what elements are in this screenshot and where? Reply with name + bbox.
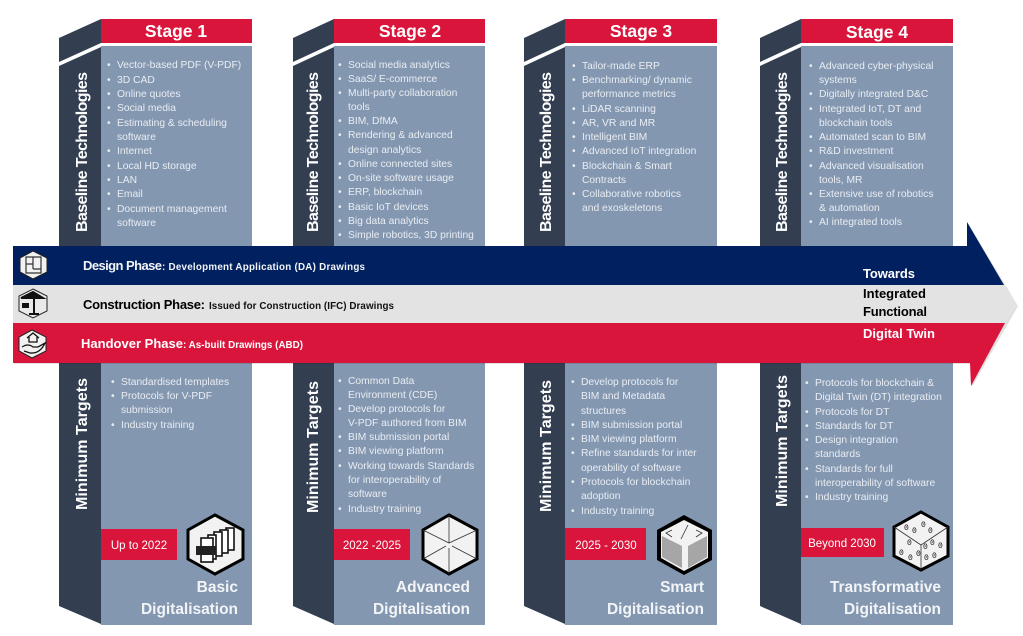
stage 4 baseline technologies list: systems xyxy=(819,75,857,86)
text: construction phase detail: Issued for Construction (IFC) Drawings xyxy=(209,301,395,312)
label: minimum targets: Minimum Targets xyxy=(538,380,555,512)
stage 2 minimum targets list: V-PDF authored from BIM xyxy=(348,418,466,429)
stage 1 baseline technologies list: Document management xyxy=(117,204,227,215)
stage 4 baseline technologies list: Extensive use of robotics xyxy=(819,189,933,200)
stage 1 minimum targets list: Standardised templates xyxy=(121,377,229,388)
stage 4 minimum targets list: Protocols for DT xyxy=(815,407,890,418)
stage 2 baseline technologies list: • xyxy=(338,173,342,184)
stage 3 baseline technologies list: Intelligent BIM xyxy=(582,132,647,143)
stage 2 minimum targets list: • xyxy=(338,446,342,457)
stage 4 baseline technologies list: • xyxy=(809,61,813,72)
stage 1 baseline technologies list: • xyxy=(107,89,111,100)
stage 1 baseline technologies list: Email xyxy=(117,189,143,200)
stage 3 title: Smart xyxy=(660,579,704,596)
icon: binary cube hexagon: 0 xyxy=(928,527,933,536)
stage 2 baseline technologies list: Basic IoT devices xyxy=(348,202,429,213)
label: baseline technologies: Baseline Technologies xyxy=(74,72,91,232)
stage 2 baseline technologies list: Simple robotics, 3D printing xyxy=(348,230,474,241)
stage 3 minimum targets list: • xyxy=(571,377,575,388)
text: towards integrated functional digital twin: Digital Twin xyxy=(863,326,935,341)
stage 1 baseline technologies list: software xyxy=(117,218,156,229)
date badge: 2025-2030 xyxy=(565,528,646,560)
stage 2 baseline technologies list: On-site software usage xyxy=(348,173,454,184)
icon: binary cube hexagon: 0 xyxy=(930,539,935,548)
arrow band: design phase xyxy=(13,222,1004,285)
icon: binary cube hexagon: 0 xyxy=(923,543,928,552)
stage 4 baseline technologies list: • xyxy=(809,217,813,228)
stage 2 baseline technologies list: • xyxy=(338,216,342,227)
arrow: three-phase timeline xyxy=(13,222,1018,387)
icon: house in hand xyxy=(19,330,46,358)
stage 4 baseline technologies list: • xyxy=(809,89,813,100)
panel: stage 2 column xyxy=(293,19,485,625)
stage 4 minimum targets list: interoperability of software xyxy=(815,478,935,489)
stage 3 minimum targets list: • xyxy=(571,434,575,445)
text: towards integrated functional digital twin xyxy=(863,266,935,341)
stage 2 baseline technologies list: • xyxy=(338,202,342,213)
stage 3 minimum targets list: operability of software xyxy=(581,463,681,474)
stage 4 header xyxy=(801,19,953,43)
stage 1 minimum targets list xyxy=(111,377,229,431)
icon: empty cube hexagon xyxy=(423,515,477,574)
stage 1 minimum targets list: • xyxy=(111,377,115,388)
icon: binary cube hexagon: 0 xyxy=(907,539,912,548)
stage 4 baseline technologies list: Advanced visualisation xyxy=(819,161,924,172)
stage 2 baseline technologies list: SaaS/ E-commerce xyxy=(348,74,438,85)
stage 4 minimum targets list: standards xyxy=(815,449,860,460)
stage 3 baseline technologies list: • xyxy=(572,75,576,86)
stage 2 minimum targets list: • xyxy=(338,404,342,415)
stage 2 baseline technologies list: Rendering & advanced xyxy=(348,130,453,141)
stage 3 baseline technologies list: LiDAR scanning xyxy=(582,104,656,115)
stage 3 minimum targets list: BIM viewing platform xyxy=(581,434,677,445)
stage 3 minimum targets list: • xyxy=(571,420,575,431)
date badge: beyond 2030 xyxy=(801,528,884,557)
stage 2 baseline technologies list: • xyxy=(338,230,342,241)
stage 4 baseline technologies list: Automated scan to BIM xyxy=(819,132,926,143)
stage 2 baseline technologies list: BIM, DfMA xyxy=(348,116,398,127)
stage 2 baseline technologies list: • xyxy=(338,116,342,127)
stage 4 title: Transformative xyxy=(830,579,941,596)
stage 3 title: Digitalisation xyxy=(607,601,704,618)
stage 3 baseline technologies list: Tailor-made ERP xyxy=(582,61,660,72)
text: towards integrated functional digital twin: Functional xyxy=(863,304,927,319)
stage 3 baseline technologies list xyxy=(572,61,697,214)
stage 3 minimum targets list: Industry training xyxy=(581,506,655,517)
stage 2 title: Digitalisation xyxy=(373,601,470,618)
stage 4 header: Stage 4 xyxy=(846,22,908,42)
stage 1 baseline technologies list: • xyxy=(107,60,111,71)
stage 4 baseline technologies list: AI integrated tools xyxy=(819,217,902,228)
stage 4 baseline technologies list: • xyxy=(809,132,813,143)
date badge: 2022-2025: 2022 -2025 xyxy=(343,540,401,552)
stage 2 baseline technologies list: • xyxy=(338,74,342,85)
stage 2 baseline technologies list: design analytics xyxy=(348,145,421,156)
stage 2 baseline technologies list: • xyxy=(338,187,342,198)
stage 3 baseline technologies list: • xyxy=(572,61,576,72)
stage 3 baseline technologies list: AR, VR and MR xyxy=(582,118,655,129)
icon: binary cube hexagon: 0 xyxy=(908,554,913,563)
text: handover phase detail: : As-built Drawings (ABD) xyxy=(183,340,303,351)
arrow band: handover phase xyxy=(13,323,1005,386)
stage 1 baseline technologies list: • xyxy=(107,103,111,114)
stage 4 baseline technologies list: & automation xyxy=(819,203,880,214)
panel: stage 3 column xyxy=(524,19,717,625)
stage 3 minimum targets list: Develop protocols for xyxy=(581,377,679,388)
stage 4 baseline technologies list: • xyxy=(809,146,813,157)
stage 3 baseline technologies list: • xyxy=(572,189,576,200)
stage 3 minimum targets list: • xyxy=(571,506,575,517)
icon: binary cube hexagon: 0 xyxy=(904,524,909,533)
stage 4 baseline technologies list: • xyxy=(809,104,813,115)
stage 3 baseline technologies list: and exoskeletons xyxy=(582,203,662,214)
stage 4 minimum targets list: • xyxy=(805,492,809,503)
icon: binary cube hexagon: 0 xyxy=(912,527,917,536)
stage 2 minimum targets list: BIM viewing platform xyxy=(348,446,444,457)
stage 2 baseline technologies list: • xyxy=(338,60,342,71)
label: baseline technologies: Baseline Technologies xyxy=(538,72,555,232)
text: design phase: Design Phase xyxy=(83,258,162,273)
text: handover phase: Handover Phase xyxy=(81,336,183,351)
stage 3 baseline technologies list: Advanced IoT integration xyxy=(582,146,697,157)
stage 1 baseline technologies list: Internet xyxy=(117,146,152,157)
stage 1 minimum targets list: submission xyxy=(121,405,173,416)
stage 2 minimum targets list: Develop protocols for xyxy=(348,404,446,415)
stage 2 minimum targets list: • xyxy=(338,376,342,387)
icon: binary cube hexagon xyxy=(894,512,948,570)
stage 2 minimum targets list: Industry training xyxy=(348,504,422,515)
stage 1 baseline technologies list: • xyxy=(107,189,111,200)
text: design phase detail: : Development Application (DA) Drawings xyxy=(162,262,366,273)
date badge: 2022-2025 xyxy=(334,529,410,560)
stage 1 title: Digitalisation xyxy=(141,601,238,618)
stage 1 baseline technologies list: • xyxy=(107,161,111,172)
icon: pdf documents hexagon xyxy=(188,515,243,574)
stage 3 minimum targets list: structures xyxy=(581,406,626,417)
stage 2 baseline technologies list: • xyxy=(338,130,342,141)
stage 3 baseline technologies list: performance metrics xyxy=(582,89,676,100)
stage 3 minimum targets list: BIM and Metadata xyxy=(581,391,665,402)
stage 2 title xyxy=(373,579,470,618)
stage 3 minimum targets list: Refine standards for inter xyxy=(581,448,697,459)
stage 3 minimum targets list: • xyxy=(571,477,575,488)
stage 3 minimum targets list xyxy=(571,377,697,517)
stage 3 baseline technologies list: • xyxy=(572,161,576,172)
label: minimum targets: Minimum Targets xyxy=(74,378,91,510)
stage 3 baseline technologies list: Contracts xyxy=(582,175,626,186)
stage 4 title: Digitalisation xyxy=(844,601,941,618)
text: construction phase: Construction Phase: xyxy=(83,297,205,312)
stage 2 minimum targets list xyxy=(338,376,474,515)
text: towards integrated functional digital twin: Towards xyxy=(863,266,915,281)
stage 3 minimum targets list: BIM submission portal xyxy=(581,420,682,431)
stage 3 baseline technologies list: • xyxy=(572,118,576,129)
stage 2 baseline technologies list: Social media analytics xyxy=(348,60,450,71)
stage 4 baseline technologies list: Digitally integrated D&C xyxy=(819,89,929,100)
stage 4 baseline technologies list: tools, MR xyxy=(819,175,862,186)
stage 3 header: Stage 3 xyxy=(610,21,672,41)
icon: binary cube hexagon: 0 xyxy=(938,542,943,551)
stage 2 baseline technologies list: • xyxy=(338,88,342,99)
stage 1 baseline technologies list xyxy=(107,60,241,229)
stage 1 baseline technologies list: Estimating & scheduling xyxy=(117,118,227,129)
stage 4 minimum targets list: • xyxy=(805,378,809,389)
stage 3 minimum targets list: Protocols for blockchain xyxy=(581,477,691,488)
stage 1 minimum targets list: Protocols for V-PDF xyxy=(121,391,212,402)
stage 1 baseline technologies list: • xyxy=(107,146,111,157)
stage 4 minimum targets list: Industry training xyxy=(815,492,889,503)
stage 4 baseline technologies list: • xyxy=(809,161,813,172)
icon: crane xyxy=(19,289,47,318)
label: baseline technologies: Baseline Technologies xyxy=(774,72,791,232)
date badge: up to 2022 xyxy=(101,529,177,560)
stage 2 minimum targets list: Common Data xyxy=(348,376,415,387)
stage 4 baseline technologies list: Advanced cyber-physical xyxy=(819,61,933,72)
stage 1 baseline technologies list: • xyxy=(107,204,111,215)
stage 1 header: Stage 1 xyxy=(145,21,207,41)
stage 1 baseline technologies list: Local HD storage xyxy=(117,161,197,172)
icon: binary cube hexagon: 0 xyxy=(921,521,926,530)
stage 3 minimum targets list: • xyxy=(571,448,575,459)
stage 4 baseline technologies list: R&D investment xyxy=(819,146,894,157)
stage 1 title xyxy=(141,579,238,618)
stage 3 baseline technologies list: • xyxy=(572,146,576,157)
stage 3 title xyxy=(607,579,704,618)
stage 2 baseline technologies list xyxy=(338,60,474,241)
arrow band: construction phase xyxy=(13,285,1017,323)
stage 1 header xyxy=(101,19,252,43)
stage 1 title: Basic xyxy=(197,579,238,596)
stage 1 minimum targets list: Industry training xyxy=(121,420,195,431)
stage 1 baseline technologies list: 3D CAD xyxy=(117,75,155,86)
stage 1 baseline technologies list: LAN xyxy=(117,175,137,186)
stage 4 baseline technologies list: blockchain tools xyxy=(819,118,892,129)
stage 4 minimum targets list: • xyxy=(805,421,809,432)
stage 4 minimum targets list: Digital Twin (DT) integration xyxy=(815,392,942,403)
stage 4 minimum targets list xyxy=(805,378,942,503)
stage 4 minimum targets list: • xyxy=(805,464,809,475)
stage 1 baseline technologies list: • xyxy=(107,75,111,86)
stage 4 minimum targets list: Protocols for blockchain & xyxy=(815,378,934,389)
date badge: up to 2022: Up to 2022 xyxy=(111,540,167,552)
stage 1 baseline technologies list: software xyxy=(117,132,156,143)
stage 3 baseline technologies list: • xyxy=(572,132,576,143)
stage 2 minimum targets list: software xyxy=(348,489,387,500)
stage 1 baseline technologies list: Online quotes xyxy=(117,89,181,100)
stage 2 title: Advanced xyxy=(396,579,470,596)
stage 1 baseline technologies list: • xyxy=(107,118,111,129)
stage 2 minimum targets list: for interoperability of xyxy=(348,475,441,486)
stage 3 baseline technologies list: Collaborative robotics xyxy=(582,189,681,200)
stage 2 minimum targets list: • xyxy=(338,432,342,443)
icon: code cube hexagon xyxy=(657,515,712,575)
stage 2 baseline technologies list: ERP, blockchain xyxy=(348,187,422,198)
stage 2 baseline technologies list: Multi-party collaboration xyxy=(348,88,458,99)
icon: floor plan xyxy=(20,251,47,279)
text: towards integrated functional digital twin: Integrated xyxy=(863,286,926,301)
label: baseline technologies: Baseline Technologies xyxy=(305,72,322,232)
stage 2 baseline technologies list: tools xyxy=(348,102,370,113)
stage 4 minimum targets list: Standards for full xyxy=(815,464,893,475)
stage 4 minimum targets list: Design integration xyxy=(815,435,898,446)
stage 4 minimum targets list: Standards for DT xyxy=(815,421,894,432)
stage 4 baseline technologies list: Integrated IoT, DT and xyxy=(819,104,922,115)
stage 4 title xyxy=(830,579,941,618)
stage 1 minimum targets list: • xyxy=(111,391,115,402)
stage 2 baseline technologies list: Big data analytics xyxy=(348,216,429,227)
stage 4 minimum targets list: • xyxy=(805,407,809,418)
stage 4 baseline technologies list xyxy=(809,61,933,228)
stage 2 baseline technologies list: Online connected sites xyxy=(348,159,452,170)
icon: binary cube hexagon: 0 xyxy=(916,550,921,559)
stage 4 baseline technologies list: • xyxy=(809,189,813,200)
stage 2 minimum targets list: Working towards Standards xyxy=(348,461,474,472)
stage 4 minimum targets list: • xyxy=(805,435,809,446)
stage 2 header xyxy=(334,19,485,43)
stage 2 header: Stage 2 xyxy=(379,21,441,41)
icon: binary cube hexagon: 0 xyxy=(924,554,929,563)
date badge: 2025-2030: 2025 - 2030 xyxy=(575,540,637,552)
panel: stage 1 column xyxy=(59,19,252,625)
stage 1 baseline technologies list: Vector-based PDF (V-PDF) xyxy=(117,60,241,71)
label: minimum targets: Minimum Targets xyxy=(774,375,791,507)
stage 1 baseline technologies list: • xyxy=(107,175,111,186)
date badge: beyond 2030: Beyond 2030 xyxy=(808,538,876,550)
stage 2 minimum targets list: BIM submission portal xyxy=(348,432,449,443)
stage 3 header xyxy=(565,19,717,43)
stage 3 baseline technologies list: • xyxy=(572,104,576,115)
stage 1 minimum targets list: • xyxy=(111,420,115,431)
stage 1 baseline technologies list: Social media xyxy=(117,103,176,114)
stage 2 minimum targets list: Environment (CDE) xyxy=(348,390,437,401)
stage 3 baseline technologies list: Benchmarking/ dynamic xyxy=(582,75,692,86)
panel: stage 4 column xyxy=(760,19,953,625)
stage 2 minimum targets list: • xyxy=(338,461,342,472)
icon: binary cube hexagon: 0 xyxy=(932,552,937,561)
stage 2 baseline technologies list: • xyxy=(338,159,342,170)
stage 3 minimum targets list: adoption xyxy=(581,491,621,502)
icon: binary cube hexagon: 0 xyxy=(899,549,904,558)
stage 2 minimum targets list: • xyxy=(338,504,342,515)
stage 3 baseline technologies list: Blockchain & Smart xyxy=(582,161,672,172)
label: minimum targets: Minimum Targets xyxy=(305,381,322,513)
